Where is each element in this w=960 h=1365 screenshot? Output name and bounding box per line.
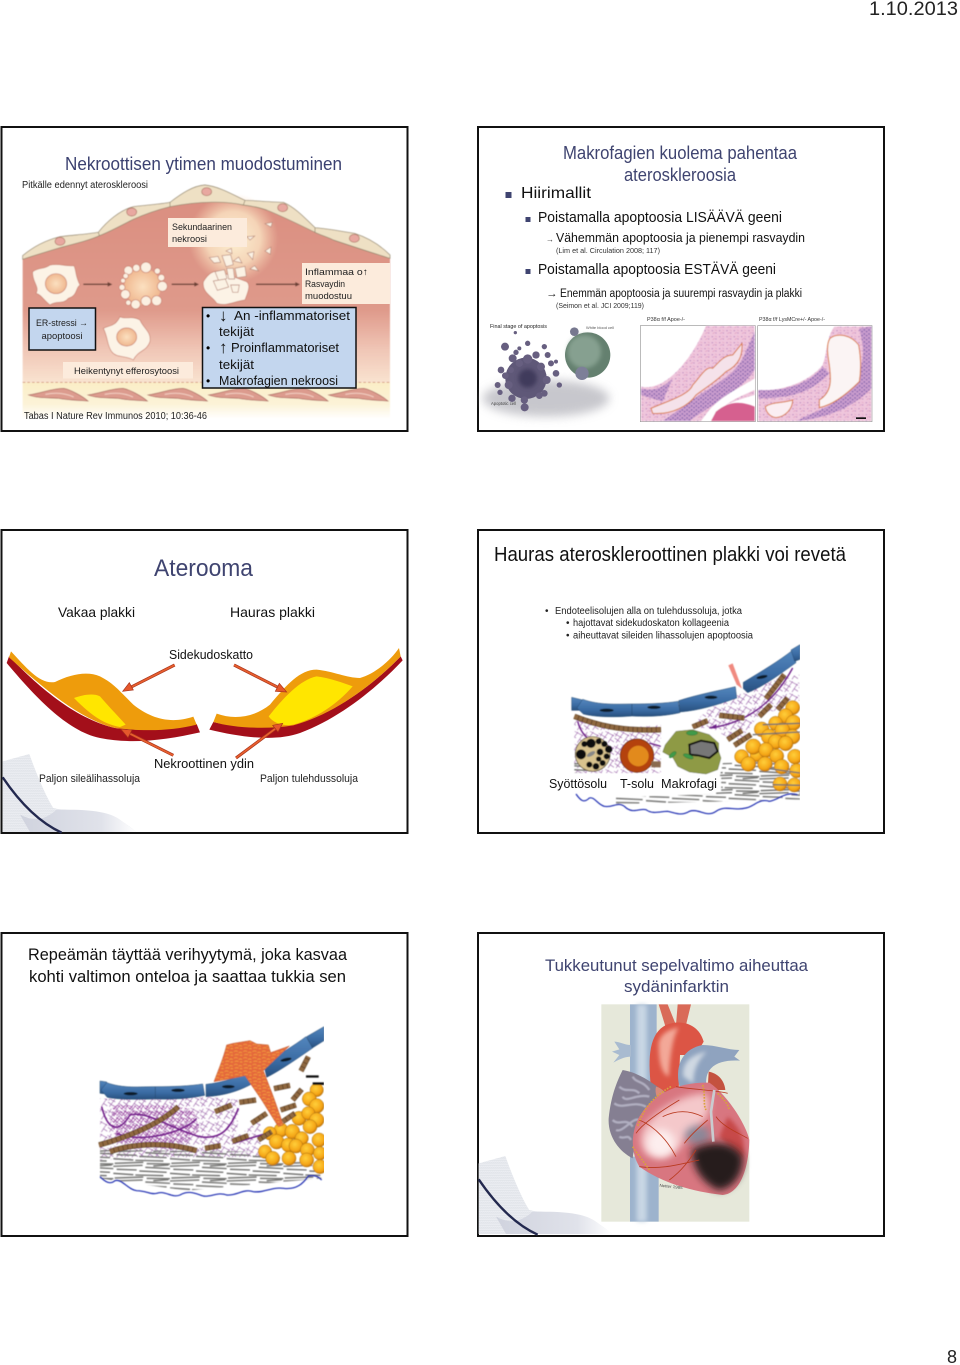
label box: ER-stressi: ER-stressi → xyxy=(36,318,88,329)
heading: Tukkeutunut sepelvaltimo aiheuttaa xyxy=(545,956,809,975)
heading xyxy=(545,956,809,996)
illustration: ruptured plaque with clot xyxy=(99,1027,327,1196)
callout box: macrophage effects: • xyxy=(206,341,210,355)
label box: Inflammaatio: Rasvaydin xyxy=(305,279,345,290)
heading: ateroskleroosia xyxy=(624,165,737,185)
callout box: macrophage effects xyxy=(202,306,356,388)
callout box: macrophage effects: tekijät xyxy=(219,358,255,372)
image: apoptotic cell and macrophage: Final stage of apoptosis xyxy=(490,324,547,330)
callout box: macrophage effects: ↑ xyxy=(219,338,228,357)
bullet list: → xyxy=(546,235,554,244)
label box: Heikentynyt efferosytoosi: Heikentynyt efferosytoosi xyxy=(74,366,179,377)
label: Paljon sileälihassoluja: Paljon sileälihassoluja xyxy=(39,773,141,785)
bullet text: • xyxy=(566,630,570,642)
image: histology wild type xyxy=(640,317,755,422)
bullet text: • xyxy=(566,618,570,629)
heading xyxy=(563,143,798,185)
panel: Hauras plakki voi revetä xyxy=(478,530,884,833)
illustration: heart with infarct xyxy=(601,1004,749,1222)
bullet list: (Lim et al. Circulation 2008; 117) xyxy=(556,246,660,255)
panel: Makrofagien kuolema xyxy=(478,127,884,431)
label box: Heikentynyt efferosytoosi xyxy=(63,362,193,378)
callout box: macrophage effects: ↓ xyxy=(219,306,228,325)
bullet text: • xyxy=(545,606,549,617)
bullet list: Poistamalla apoptoosia LISÄÄVÄ geeni xyxy=(538,209,782,226)
label: Makrofagi: Makrofagi xyxy=(661,776,717,791)
diagram: stable plaque xyxy=(7,651,200,741)
arrows: labels to plaques xyxy=(121,665,287,758)
panel: Tukkeutunut sepelvaltimo xyxy=(478,933,884,1236)
callout box: macrophage effects: Makrofagien nekroosi xyxy=(219,374,338,388)
heading xyxy=(28,945,348,986)
label box: Inflammaatio xyxy=(302,263,390,304)
heading: kohti valtimon onteloa ja saattaa tukkia sen xyxy=(29,967,346,986)
bullet list: Poistamalla apoptoosia ESTÄVÄ geeni xyxy=(538,261,776,278)
bullet list: (Seimon et al. JCI 2009;119) xyxy=(556,301,644,310)
label: T-solu: T-solu xyxy=(620,776,654,791)
label box: ER-stressi: apoptoosi xyxy=(42,331,82,342)
illustration: vulnerable plaque tissue xyxy=(546,645,804,814)
heading: Makrofagien kuolema pahentaa xyxy=(563,143,798,163)
callout box: macrophage effects: An -inflammatoriset xyxy=(234,309,351,323)
label: Paljon tulehdussoluja: Paljon tulehdussoluja xyxy=(260,773,359,785)
decorative corner swoosh xyxy=(3,754,136,833)
heading: sydäninfarktin xyxy=(624,977,729,996)
bullet text xyxy=(545,606,753,642)
image: apoptotic cell and macrophage xyxy=(483,324,614,417)
bullet list: → xyxy=(546,288,558,300)
image: apoptotic cell and macrophage: Apoptotic cell xyxy=(491,401,516,406)
decorative corner swoosh xyxy=(479,1156,612,1235)
image: apoptotic cell and macrophage: White blood cell xyxy=(586,325,614,330)
label box: Inflammaatio: Inflammaa o↑ xyxy=(305,267,368,278)
illustration: heart with infarct: Netter 1985 xyxy=(659,1183,684,1190)
label: Vakaa plakki: Vakaa plakki xyxy=(58,604,135,620)
illustration: lesion cross-section xyxy=(23,185,390,419)
image: histology knockout xyxy=(758,317,872,422)
bullet list: Enemmän apoptoosia ja suurempi rasvaydin ja plakki xyxy=(560,288,802,300)
bullet list xyxy=(506,185,805,310)
heading: Aterooma xyxy=(154,555,254,582)
label: Hauras plakki: Hauras plakki xyxy=(230,604,315,620)
label box: Sekundaarinen nekroosi: nekroosi xyxy=(172,234,207,245)
callout box: macrophage effects: • xyxy=(206,374,210,388)
label box: Sekundaarinen nekroosi: Sekundaarinen xyxy=(172,222,232,233)
panel: Aterooma xyxy=(2,530,408,833)
bullet text: hajottavat sidekudoskaton kollageenia xyxy=(573,618,729,629)
panel: Nekroottisen ytimen muodostuminen xyxy=(2,127,408,431)
callout box: macrophage effects: tekijät xyxy=(219,325,255,339)
bullet list: Hiirimallit xyxy=(521,185,592,202)
callout box: macrophage effects: Proinflammatoriset xyxy=(231,341,340,355)
label: Nekroottinen ydin: Nekroottinen ydin xyxy=(154,757,254,771)
panel: Repeämän täyttää verihyytymä xyxy=(2,933,408,1236)
label box: Sekundaarinen nekroosi xyxy=(168,218,247,247)
heading: Nekroottisen ytimen muodostuminen xyxy=(65,154,342,174)
image: histology knockout: P38α f/f LysMCre+/- Apoe-/- xyxy=(759,317,825,323)
label: Syöttösolu: Syöttösolu xyxy=(549,776,607,791)
label: Sidekudoskatto: Sidekudoskatto xyxy=(169,648,253,662)
heading: Hauras ateroskleroottinen plakki voi revetä xyxy=(494,544,847,566)
citation: Tabas I Nature Rev Immunos 2010; 10:36-46 xyxy=(24,411,207,422)
heading: Repeämän täyttää verihyytymä, joka kasvaa xyxy=(28,945,348,964)
label box: Inflammaatio: muodostuu xyxy=(305,291,352,302)
image: histology wild type: P38α f/f Apoe-/- xyxy=(647,317,685,323)
bullet text: Endoteelisolujen alla on tulehdussoluja, jotka xyxy=(555,606,742,617)
label box: ER-stressi xyxy=(29,308,96,350)
bullet list: Vähemmän apoptoosia ja pienempi rasvaydin xyxy=(556,231,805,245)
subheading: Pitkälle edennyt ateroskleroosi xyxy=(22,180,148,191)
bullet text: aiheuttavat sileiden lihassolujen apoptoosia xyxy=(573,630,753,642)
callout box: macrophage effects: • xyxy=(206,309,210,323)
diagram: vulnerable plaque xyxy=(209,648,403,738)
